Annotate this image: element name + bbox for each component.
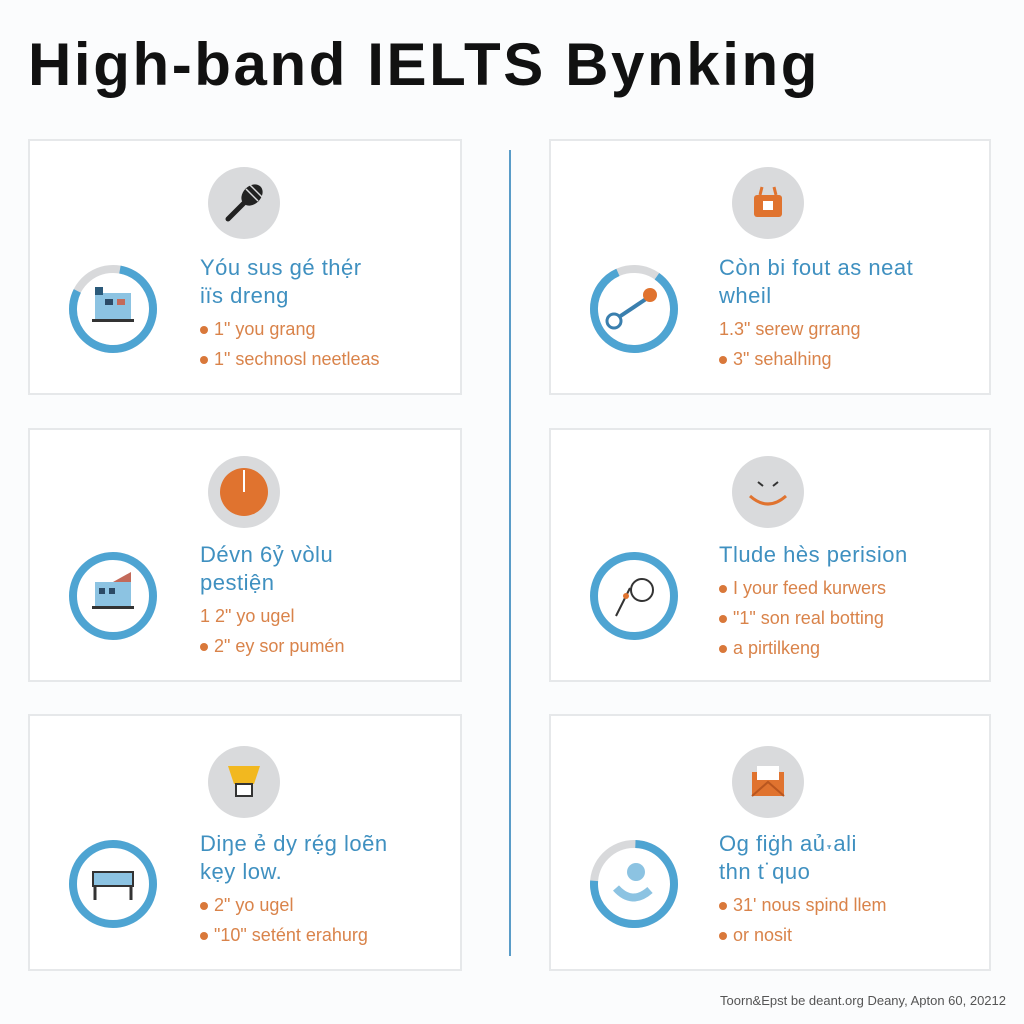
icon: clock xyxy=(208,456,280,528)
text block: Diŋe ẻ dy rẹ́g loẽn xyxy=(200,831,388,856)
icon: envelope xyxy=(732,746,804,818)
ring: desk xyxy=(69,840,157,928)
panel: middle left xyxy=(28,428,462,682)
panel: bottom right xyxy=(549,714,991,971)
text block: wheil xyxy=(719,283,772,308)
text block: thn t˙quo xyxy=(719,859,810,884)
title: High-band IELTS Bynking xyxy=(28,31,820,98)
text block: or nosit xyxy=(733,925,792,945)
text block: Og fiġh aủ˕ali xyxy=(719,831,857,856)
text block: Dévn 6ỷ vòlu xyxy=(200,542,333,567)
text block: 3" sehalhing xyxy=(733,349,831,369)
icon: face xyxy=(732,456,804,528)
text block: "10" setént erahurg xyxy=(214,925,368,945)
text block xyxy=(200,255,380,369)
ring: arm xyxy=(590,840,678,928)
text block: 1 2" yo ugel xyxy=(200,606,294,626)
ring: building xyxy=(69,552,157,640)
icon: microphone xyxy=(208,167,280,239)
text block: 2" yo ugel xyxy=(214,895,293,915)
text block: 1.3" serew grrang xyxy=(719,319,860,339)
panel: bottom left xyxy=(28,714,462,971)
text block xyxy=(719,255,913,369)
panel: top right xyxy=(549,139,991,395)
divider line xyxy=(509,150,511,956)
text block xyxy=(719,542,908,658)
text block: Tlude hès perision xyxy=(719,542,908,567)
text block xyxy=(719,831,887,945)
text block: iїs dreng xyxy=(200,283,289,308)
icon: trophy xyxy=(208,746,280,818)
ring: building xyxy=(69,265,157,353)
text block: kẹy low. xyxy=(200,859,282,884)
ring: key xyxy=(590,265,678,353)
footer credit: Toorn&Epst be deant.org Deany, Apton 60, 20212 xyxy=(720,993,1006,1008)
panel: middle right xyxy=(549,428,991,682)
panel: top left xyxy=(28,139,462,395)
text block: I your feed kurwers xyxy=(733,578,886,598)
text block: "1" son real botting xyxy=(733,608,884,628)
text block: 31' nous spind llem xyxy=(733,895,887,915)
text block xyxy=(200,831,388,945)
icon: bag xyxy=(732,167,804,239)
ring: gauge xyxy=(590,552,678,640)
text block: Còn bi fout as neat xyxy=(719,255,913,280)
text block: a pirtilkeng xyxy=(733,638,820,658)
text block: Yóu sus gé thẹ́r xyxy=(200,255,362,280)
text block xyxy=(200,542,344,656)
text block: 1" you grang xyxy=(214,319,315,339)
text block: 1" sechnosl neetleas xyxy=(214,349,380,369)
text block: pestiện xyxy=(200,570,274,595)
text block: 2" ey sor pumén xyxy=(214,636,344,656)
